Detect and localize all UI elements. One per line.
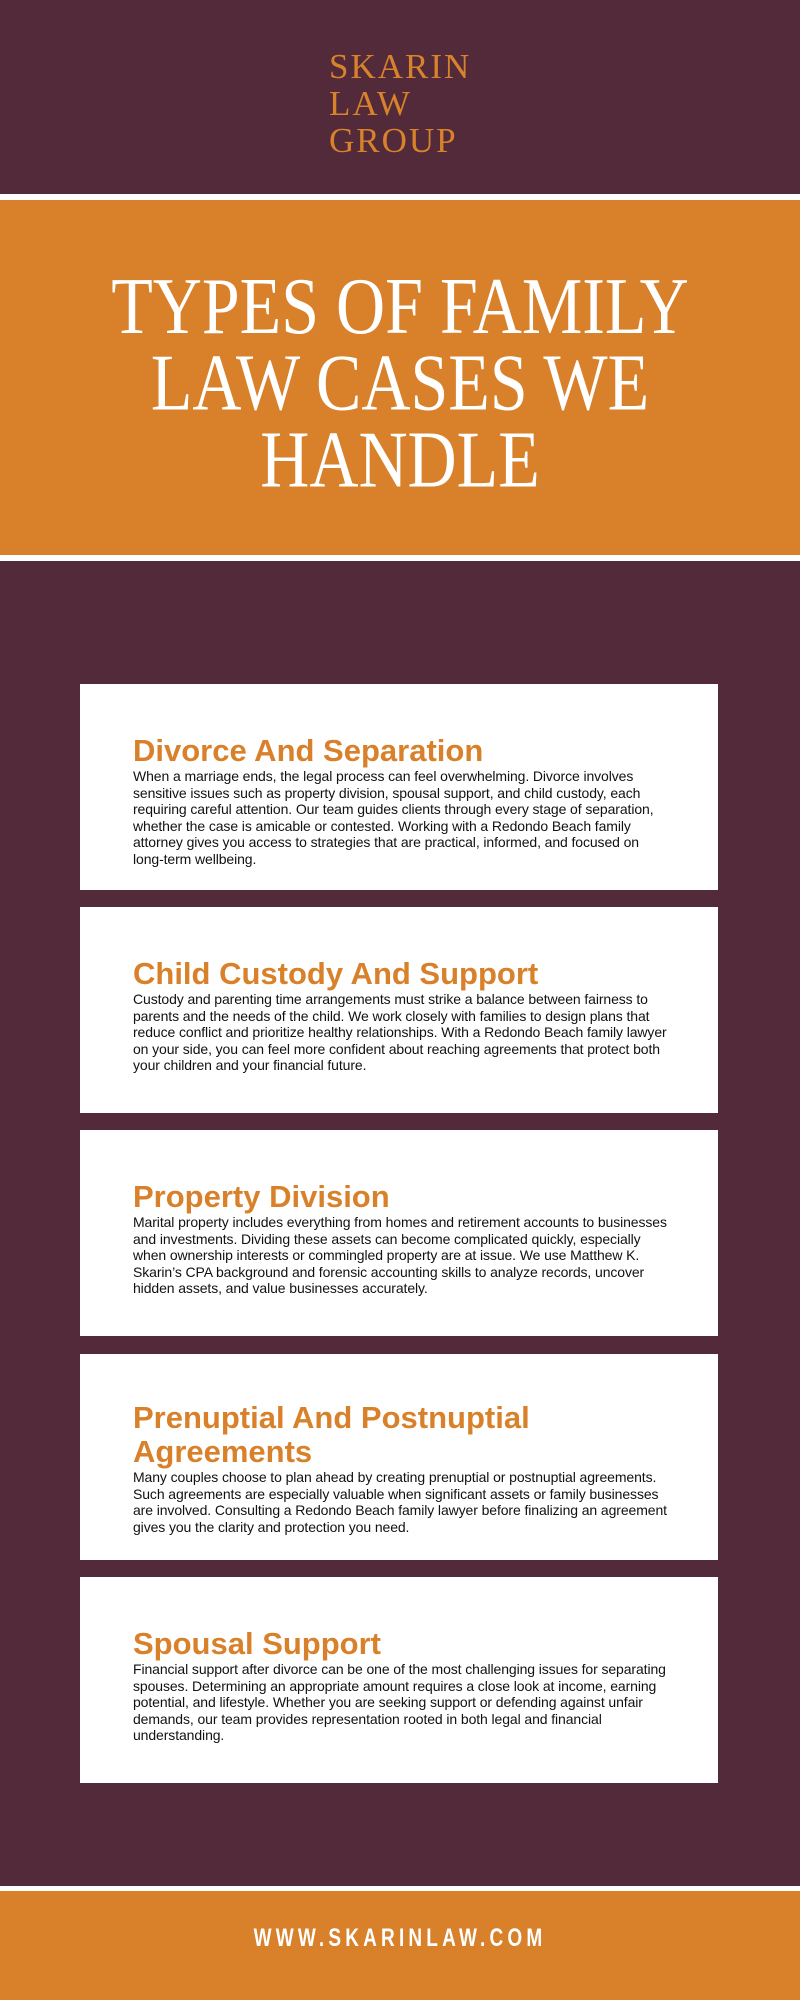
card: spousal support: Financial support after divorce can be one of the most challenging issues for separating spouses. Determining an appropriate amount requires a close look at income, earning potential, and lifestyle. Whether you are seeking support or defending against unfair demands, our team provides representation rooted in both legal and financial understanding.	[133, 1661, 666, 1743]
card: spousal support	[80, 1577, 718, 1783]
card: spousal support: Spousal Support	[133, 1626, 381, 1661]
title: LAW CASES WE	[151, 338, 649, 427]
card: divorce: Divorce And Separation	[133, 733, 483, 768]
logo: GROUP	[329, 121, 458, 160]
card: child custody	[80, 907, 718, 1113]
logo: LAW	[329, 84, 412, 123]
card: prenuptial: Prenuptial And Postnuptial	[133, 1400, 530, 1435]
card: property division	[80, 1130, 718, 1336]
card: divorce: When a marriage ends, the legal process can feel overwhelming. Divorce involves sensitive issues such as property division, spousal support, and child custody, each requiring careful attention. Our team guides clients through every stage of separation, whether the case is amicable or contested. Working with a Redondo Beach family attorney gives you access to strategies that are practical, informed, and focused on long-term wellbeing.	[133, 768, 654, 866]
title	[111, 261, 689, 504]
title band	[0, 200, 800, 555]
card: child custody: Child Custody And Support	[133, 956, 538, 991]
footer band	[0, 1891, 800, 2000]
title: HANDLE	[260, 414, 540, 504]
card: prenuptial	[80, 1354, 718, 1560]
card: child custody: Custody and parenting time arrangements must strike a balance between fairness to parents and the needs of the child. We work closely with families to design plans that reduce conflict and prioritize healthy relationships. With a Redondo Beach family lawyer on your side, you can feel more confident about reaching agreements that protect both your children and your financial future.	[133, 991, 667, 1073]
logo	[329, 47, 471, 160]
footer url: WWW.SKARINLAW.COM	[254, 1924, 546, 1952]
card: prenuptial: Agreements	[133, 1434, 312, 1469]
card: prenuptial: Many couples choose to plan ahead by creating prenuptial or postnuptial agreements. Such agreements are especially valuable when significant assets or family businesses are involved. Consulting a Redondo Beach family lawyer before finalizing an agreement gives you the clarity and protection you need.	[133, 1469, 667, 1534]
card: property division: Property Division	[133, 1179, 390, 1214]
title: TYPES OF FAMILY	[111, 261, 689, 351]
logo: SKARIN	[329, 47, 471, 86]
card: divorce	[80, 684, 718, 890]
card: property division: Marital property includes everything from homes and retirement accounts to businesses and investments. Dividing these assets can become complicated quickly, especially when ownership interests or commingled property are at issue. We use Matthew K. Skarin’s CPA background and forensic accounting skills to analyze records, uncover hidden assets, and value businesses accurately.	[133, 1214, 667, 1296]
